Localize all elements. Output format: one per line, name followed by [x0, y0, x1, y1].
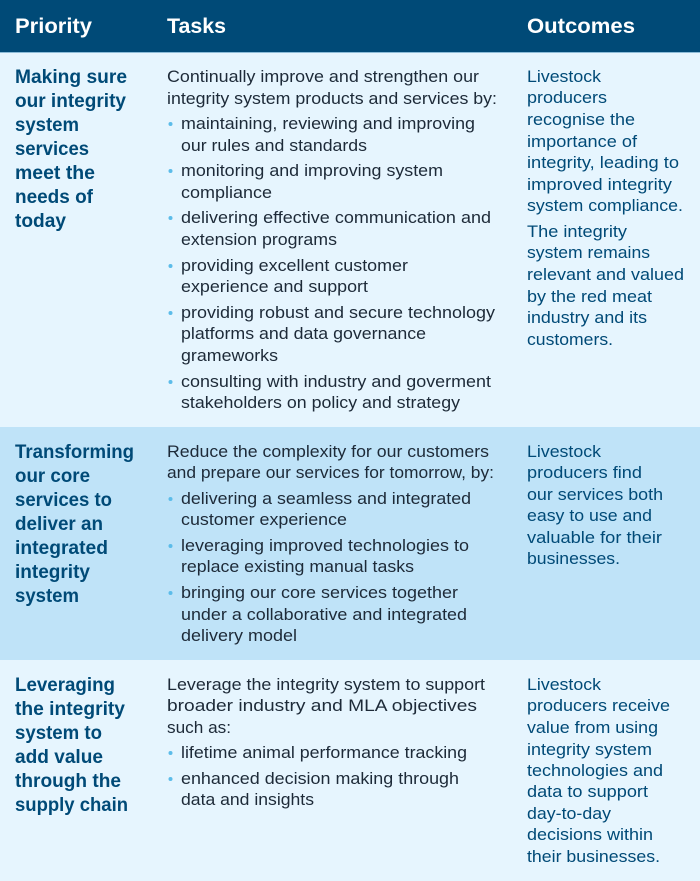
tasks 1 text block: grameworks	[181, 346, 278, 365]
tasks 2 text block: replace existing manual tasks	[181, 557, 414, 576]
priority 1 heading: system	[15, 115, 79, 136]
priority 2 heading: deliver an	[15, 514, 103, 535]
priority 3 heading: the integrity	[15, 699, 125, 720]
header row	[0, 0, 700, 53]
outcomes 1 text block: system compliance.	[527, 196, 683, 215]
header row: Priority	[15, 15, 92, 38]
outcomes 3 text block: technologies and	[527, 761, 663, 780]
priority 2 heading: system	[15, 586, 79, 607]
priority 2 heading: Transforming	[15, 442, 134, 463]
tasks 1 text block: extension programs	[181, 230, 337, 249]
outcomes 1 text block: producers	[527, 88, 607, 107]
priority 1 heading: Making sure	[15, 67, 127, 88]
priority 3 heading: supply chain	[15, 795, 128, 816]
outcomes 1 text block	[527, 67, 684, 349]
priority 1 heading: our integrity	[15, 91, 126, 112]
outcomes 1 text block: industry and its	[527, 308, 647, 327]
outcomes 3 text block: their businesses.	[527, 847, 660, 866]
priority 1 heading: needs of	[15, 187, 94, 208]
outcomes 2 text block: our services both	[527, 485, 663, 504]
priority 3 heading: Leveraging	[15, 675, 115, 696]
outcomes 3 text block	[527, 675, 670, 866]
priority 1 heading	[15, 67, 127, 232]
tasks 1 text block: stakeholders on policy and strategy	[181, 393, 461, 412]
header row: Tasks	[167, 15, 226, 38]
tasks 2 text block: customer experience	[181, 510, 347, 529]
outcomes 1 text block: relevant and valued	[527, 265, 684, 284]
tasks 1 text block: Continually improve and strengthen our	[167, 67, 479, 86]
tasks 3 text block: enhanced decision making through	[181, 769, 459, 788]
tasks 1 text block: platforms and data governance	[181, 324, 426, 343]
priority 3 heading: through the	[15, 771, 121, 792]
priority 2 heading	[15, 442, 134, 607]
tasks 1 text block: our rules and standards	[181, 136, 367, 155]
priority 3 heading: add value	[15, 747, 103, 768]
outcomes 1 text block: system remains	[527, 243, 650, 262]
priority 2 heading: our core	[15, 466, 90, 487]
tasks 1 text block: maintaining, reviewing and improving	[181, 114, 475, 133]
panel: row 1 integrity system services	[0, 53, 700, 427]
outcomes 1 text block: The integrity	[527, 222, 628, 241]
outcomes 3 text block: integrity system	[527, 740, 652, 759]
tasks 1 text block: experience and support	[181, 277, 368, 296]
tasks 2 text block: under a collaborative and integrated	[181, 605, 467, 624]
outcomes 3 text block: day-to-day	[527, 804, 612, 823]
tasks 3 text block: lifetime animal performance tracking	[181, 743, 467, 762]
priority 3 heading: system to	[15, 723, 102, 744]
outcomes 1 text block: customers.	[527, 330, 613, 349]
tasks 1 text block: providing robust and secure technology	[181, 303, 496, 322]
outcomes 1 text block: Livestock	[527, 67, 602, 86]
outcomes 1 text block: integrity, leading to	[527, 153, 679, 172]
header row: Outcomes	[527, 15, 635, 38]
outcomes 2 text block: easy to use and	[527, 506, 652, 525]
outcomes 3 text block: data to support	[527, 782, 648, 801]
priority 1 heading: services	[15, 139, 89, 160]
tasks 3 text block: broader industry and MLA objectives	[167, 696, 477, 715]
outcomes 2 text block: Livestock	[527, 442, 602, 461]
outcomes 3 text block: value from using	[527, 718, 658, 737]
priority 1 heading: today	[15, 211, 66, 232]
tasks 2 text block: bringing our core services together	[181, 583, 458, 602]
tasks 3 text block: such as:	[167, 718, 231, 737]
outcomes 2 text block: producers find	[527, 463, 642, 482]
tasks 2 text block: Reduce the complexity for our customers	[167, 442, 489, 461]
panel: row 3 leveraging supply chain value	[0, 660, 700, 881]
tasks 1 text block: monitoring and improving system	[181, 161, 443, 180]
tasks 2 text block	[167, 442, 494, 645]
tasks 3 text block: Leverage the integrity system to support	[167, 675, 485, 694]
outcomes 3 text block: decisions within	[527, 825, 653, 844]
outcomes 2 text block: businesses.	[527, 549, 620, 568]
outcomes 3 text block: Livestock	[527, 675, 602, 694]
tasks 1 text block: consulting with industry and goverment	[181, 372, 491, 391]
tasks 3 text block: data and insights	[181, 790, 314, 809]
outcomes 1 text block: by the red meat	[527, 287, 652, 306]
outcomes 3 text block: producers receive	[527, 696, 670, 715]
priority 1 heading: meet the	[15, 163, 95, 184]
tasks 2 text block: leveraging improved technologies to	[181, 536, 469, 555]
tasks 1 text block: integrity system products and services by:	[167, 89, 497, 108]
tasks 2 text block: delivery model	[181, 626, 297, 645]
tasks 3 text block	[167, 675, 485, 809]
tasks 1 text block	[167, 67, 497, 412]
priority 2 heading: integrated	[15, 538, 108, 559]
priority 2 heading: services to	[15, 490, 112, 511]
outcomes 2 text block: valuable for their	[527, 528, 662, 547]
tasks 1 text block: compliance	[181, 183, 272, 202]
tasks 2 text block: delivering a seamless and integrated	[181, 489, 471, 508]
outcomes 1 text block: importance of	[527, 132, 637, 151]
tasks 1 text block: delivering effective communication and	[181, 208, 491, 227]
tasks 1 text block: providing excellent customer	[181, 256, 408, 275]
tasks 2 text block: and prepare our services for tomorrow, by:	[167, 463, 494, 482]
panel: row 2 transforming core services	[0, 427, 700, 660]
priority 3 heading	[15, 675, 128, 816]
outcomes 2 text block	[527, 442, 663, 568]
outcomes 1 text block: recognise the	[527, 110, 635, 129]
priority 2 heading: integrity	[15, 562, 90, 583]
outcomes 1 text block: improved integrity	[527, 175, 673, 194]
